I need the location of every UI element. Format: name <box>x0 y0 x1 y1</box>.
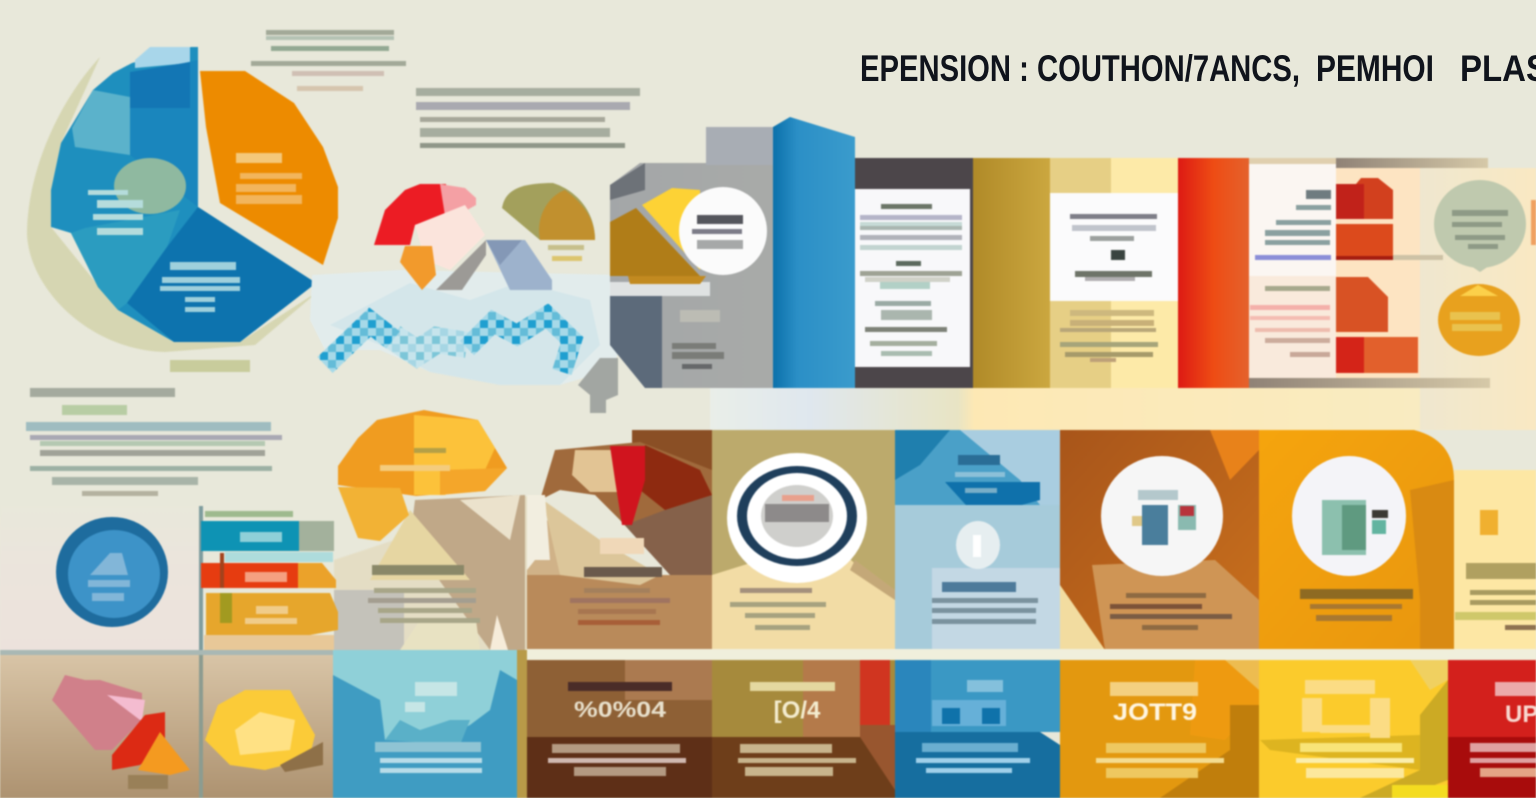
panel: amber footer <box>1060 660 1259 798</box>
pink lower-left backdrop <box>0 500 200 650</box>
brown footer label <box>568 682 672 691</box>
chart card peach panel <box>1336 168 1420 378</box>
yellow card text <box>1060 214 1158 362</box>
pie chart <box>27 47 338 352</box>
orange circle icon <box>1101 456 1223 576</box>
pie outer ring <box>27 57 320 352</box>
zigzag pale line <box>393 337 467 353</box>
text block beside pie <box>416 88 640 148</box>
blue footer label <box>405 682 457 712</box>
ring text <box>730 588 826 630</box>
vertical line lower <box>199 655 203 798</box>
folds heading <box>372 565 464 575</box>
grey box dark facet <box>610 296 662 388</box>
panel: red footer <box>1448 660 1536 798</box>
callout: gold badge <box>1438 284 1520 356</box>
icon: olive semicircle <box>502 183 595 261</box>
blue footer text <box>375 742 482 773</box>
grey box left facet <box>610 163 645 200</box>
grey box light band <box>610 282 710 296</box>
panel: yellow card <box>1050 158 1178 388</box>
pale column text <box>1455 563 1536 630</box>
olive icon caption <box>548 245 584 261</box>
footer divider line <box>0 650 333 655</box>
pie centre label <box>88 190 143 235</box>
circle label <box>692 215 743 249</box>
zigzag pale area <box>330 282 600 385</box>
panel: amber column <box>1259 430 1454 650</box>
folds text <box>368 588 480 623</box>
glow band above lower panels <box>710 388 1536 430</box>
olive footer text <box>738 744 856 776</box>
ring icon <box>727 453 867 583</box>
red block three <box>1336 337 1418 373</box>
chart card grey strip <box>1336 158 1488 168</box>
figure icon <box>956 521 1000 569</box>
red footer text <box>1470 743 1536 777</box>
panel: blue footer two <box>895 660 1060 798</box>
brown top <box>632 430 712 480</box>
blue two icon <box>932 680 1006 726</box>
grey arrow glyph <box>578 358 618 413</box>
blue two text <box>916 743 1030 773</box>
caption under pie <box>170 360 250 372</box>
amber footer text <box>1096 743 1224 778</box>
pie light wedge <box>72 90 130 155</box>
icon: blue badge <box>56 517 168 627</box>
panel: blue footer <box>333 650 517 798</box>
dark card text <box>860 204 962 356</box>
panel: brown footer <box>527 660 712 798</box>
amber column text <box>1300 589 1413 621</box>
pie blue body <box>51 47 316 342</box>
olive footer label <box>750 682 835 691</box>
pie dark column top <box>130 62 190 108</box>
yellow bar <box>206 593 338 635</box>
right glow <box>1420 168 1536 430</box>
panel: red column <box>1178 158 1249 388</box>
panel: orange column <box>1060 430 1259 650</box>
pin label <box>600 538 644 554</box>
orange slice label <box>236 153 302 204</box>
dome cream facet <box>572 450 620 492</box>
teal bar <box>201 521 299 551</box>
brown heading <box>584 567 662 577</box>
pie orange slice <box>200 71 338 265</box>
red block two <box>1336 277 1388 332</box>
amber circle icon <box>1292 456 1406 576</box>
red bar <box>201 563 299 588</box>
light strip <box>225 552 333 562</box>
red pin <box>610 446 645 525</box>
panel: ring column <box>712 430 895 650</box>
icon: yellow gem <box>205 690 323 772</box>
zigzag line left <box>325 322 393 365</box>
grey box shade <box>706 127 775 165</box>
zigzag line right <box>467 316 572 372</box>
chart card grey bottom strip <box>1249 378 1490 388</box>
icon: red fan <box>374 184 552 290</box>
zigzag chart <box>310 270 620 385</box>
text block top centre <box>251 30 406 91</box>
beige facet <box>620 490 712 575</box>
grey box text <box>672 310 724 369</box>
diamonds heading <box>955 455 1005 493</box>
panel: beige folds <box>334 495 530 650</box>
yellow footer text <box>1296 743 1414 778</box>
amber footer label <box>1110 682 1198 696</box>
pie centre column <box>130 60 198 207</box>
pie lower light wedge <box>71 210 180 310</box>
panel: stacked bars <box>199 506 338 798</box>
peach foot <box>204 635 334 651</box>
red block one <box>1336 178 1393 260</box>
zigzag pale haze <box>310 270 620 385</box>
chart card white page <box>1249 164 1336 378</box>
panel: tan footer <box>0 655 333 798</box>
white gap <box>527 495 550 570</box>
callout: sage bubble <box>1434 180 1526 272</box>
panel: blue diamonds column <box>895 430 1060 650</box>
panel: dark card <box>855 158 973 388</box>
title: EPENSION : COUTHON/7ANCS, <box>860 48 1300 89</box>
orange column text <box>1110 593 1232 630</box>
title: PEMHOI <box>1316 48 1434 89</box>
olive footer value: [O/4 <box>774 697 821 724</box>
icon: pink cube <box>52 675 190 789</box>
brown dome <box>540 442 712 525</box>
panel: grey box <box>610 127 775 388</box>
grey box body <box>610 127 775 388</box>
divider band <box>527 649 1536 660</box>
yellow footer icon <box>1302 680 1390 738</box>
panel: pale right column <box>1454 470 1536 650</box>
pie dark segment <box>127 207 316 342</box>
chart card pink lower page <box>1249 276 1336 378</box>
chart card tan strip <box>1249 158 1336 164</box>
brown footer text <box>548 744 686 776</box>
panel: yellow footer <box>1259 660 1448 798</box>
vertical line <box>199 506 203 798</box>
pie lower label <box>160 262 240 312</box>
dark card white page <box>855 189 970 367</box>
gold edge <box>517 650 527 798</box>
icon: gold gem <box>338 410 507 541</box>
yellow card white page <box>1050 193 1178 301</box>
pie centre circle <box>114 158 186 214</box>
orange edge tab <box>1531 200 1536 245</box>
panel: blue book <box>773 117 855 388</box>
diamonds text <box>932 582 1038 624</box>
panel: brown column <box>527 430 712 650</box>
strip above bars <box>205 511 293 517</box>
brown text <box>570 588 670 625</box>
panel: chart card <box>1249 158 1490 388</box>
dome dark red <box>640 445 712 510</box>
grey box white circle <box>679 187 767 275</box>
text block lower left <box>26 388 282 496</box>
amber footer value: JOTT9 <box>1113 699 1197 726</box>
pie top tip <box>135 47 190 68</box>
panel: gold column <box>973 158 1050 388</box>
brown footer value: %0%04 <box>574 697 667 722</box>
connector line <box>1393 255 1443 260</box>
grey box pie <box>610 188 706 284</box>
chart card text <box>1250 190 1331 357</box>
red footer label <box>1495 682 1536 696</box>
panel: olive footer <box>712 660 895 798</box>
